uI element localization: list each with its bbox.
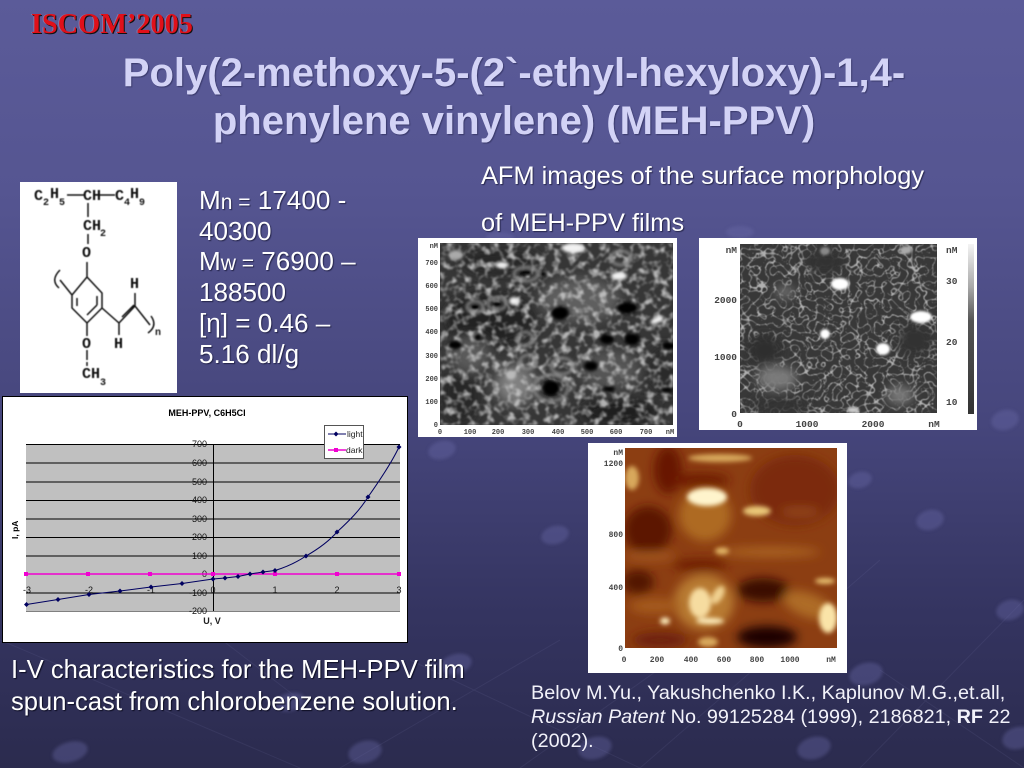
plot area: -1 <box>147 585 155 595</box>
panel: molecular structure: 2 <box>43 198 49 209</box>
panel: molecular structure: H <box>114 336 123 353</box>
AFM image: greyscale pitted film: 600 <box>610 429 622 437</box>
text block: I-V caption <box>11 656 465 717</box>
panel: molecular structure: 9 <box>139 198 145 209</box>
text block: polymer parameters: Mw = 76900 – <box>199 246 356 276</box>
AFM image: colour height map: 0 <box>622 656 627 665</box>
AFM image: greyscale pitted film: 200 <box>425 376 438 384</box>
AFM image: greyscale pitted film: 200 <box>492 429 504 437</box>
AFM image: greyscale pitted film: 300 <box>425 353 438 361</box>
AFM image: colour height map: 800 <box>609 531 623 540</box>
AFM image: greyscale network film: 0 <box>731 409 737 420</box>
AFM image: greyscale network film <box>699 238 977 430</box>
AFM image: greyscale network film: nM <box>726 245 737 256</box>
panel: molecular structure: 5 <box>59 198 65 209</box>
AFM image: greyscale pitted film: nM <box>430 243 438 251</box>
panel: molecular structure: H <box>130 186 139 203</box>
text block: polymer parameters <box>199 185 357 370</box>
AFM image: greyscale network film: 10 <box>946 397 958 408</box>
panel: molecular structure: H <box>130 276 139 293</box>
text block: polymer parameters: 188500 <box>199 277 286 307</box>
chart title: MEH-PPV, C6H5Cl <box>168 408 246 418</box>
heading: AFM caption <box>481 162 926 236</box>
text block: reference <box>531 682 1010 752</box>
AFM image: greyscale pitted film: 700 <box>640 429 652 437</box>
panel: molecular structure: CH <box>82 366 100 383</box>
AFM image: greyscale pitted film <box>418 238 677 437</box>
AFM image: greyscale network film: 2000 <box>862 419 885 430</box>
panel: molecular structure: 2 <box>100 229 106 240</box>
AFM image: greyscale pitted film: 500 <box>425 306 438 314</box>
AFM image: greyscale pitted film: 100 <box>425 399 438 407</box>
AFM image: greyscale network film: 2000 <box>714 295 737 306</box>
light series <box>24 444 402 607</box>
plot area: -3 <box>23 585 31 595</box>
AFM image: greyscale pitted film: nM <box>666 429 674 437</box>
plot area: 200 <box>192 532 207 542</box>
legend: dark <box>346 445 363 455</box>
panel: molecular structure: 3 <box>100 378 106 389</box>
legend <box>324 426 364 458</box>
panel: molecular structure: n <box>155 328 161 339</box>
plot area: 3 <box>396 585 402 595</box>
plot area: -200 <box>189 606 207 616</box>
AFM image: greyscale pitted film: 400 <box>552 429 564 437</box>
text block: polymer parameters: Mn = 17400 - <box>199 185 346 215</box>
AFM image: greyscale pitted film: 700 <box>425 260 438 268</box>
text block: reference: Russian Patent No. 99125284 (1999), 2186821, RF 22 <box>531 706 1010 728</box>
panel: I-V chart <box>2 396 408 643</box>
AFM image: colour height map: 1200 <box>604 460 623 469</box>
legend: light <box>347 429 363 439</box>
title: Poly(2-methoxy-5-(2`-ethyl-hexyloxy)-1,4- <box>123 51 905 95</box>
AFM image: colour height map: nM <box>826 656 836 665</box>
axis label: current: I, pA <box>10 521 20 539</box>
title <box>123 51 905 144</box>
panel: molecular structure: CH <box>83 188 101 205</box>
AFM image: colour height map: 800 <box>750 656 764 665</box>
AFM image: greyscale pitted film: 0 <box>434 422 438 430</box>
heading: AFM caption: AFM images of the surface morphology <box>481 162 924 190</box>
axis label: voltage: U, V <box>203 616 221 626</box>
AFM image: colour height map: 1000 <box>780 656 800 665</box>
AFM image: colour height map: 0 <box>618 645 623 654</box>
panel: molecular structure: C <box>115 188 124 205</box>
AFM image: colour height map <box>588 443 847 673</box>
AFM image: colour height map: 400 <box>609 584 623 593</box>
panel: molecular structure <box>20 182 177 393</box>
dark series <box>24 572 401 576</box>
AFM image: greyscale pitted film: 100 <box>464 429 476 437</box>
AFM image: greyscale pitted film: 300 <box>522 429 534 437</box>
AFM image: greyscale pitted film: 500 <box>581 429 593 437</box>
AFM image: greyscale network film: nM <box>946 245 958 256</box>
AFM image: colour height map: 600 <box>717 656 731 665</box>
panel: molecular structure: O <box>82 245 91 262</box>
text block: polymer parameters: 40300 <box>199 216 272 246</box>
plot area: 0 <box>202 569 207 579</box>
AFM image: greyscale network film: 1000 <box>796 419 819 430</box>
AFM image: greyscale pitted film: 400 <box>425 329 438 337</box>
title: phenylene vinylene) (MEH-PPV) <box>213 99 815 143</box>
plot area: 600 <box>192 458 207 468</box>
plot area: 500 <box>192 477 207 487</box>
text block: I-V caption: I-V characteristics for the MEH-PPV film <box>11 656 465 684</box>
panel: molecular structure: CH <box>83 218 101 235</box>
plot area: 300 <box>192 514 207 524</box>
panel: molecular structure: O <box>82 336 91 353</box>
AFM image: greyscale network film: nM <box>928 419 940 430</box>
panel: molecular structure: H <box>50 186 59 203</box>
AFM image: greyscale pitted film: 0 <box>438 429 442 437</box>
text block: polymer parameters: 5.16 dl/g <box>199 339 299 369</box>
AFM image: colour height map: nM <box>613 449 623 458</box>
plot area: 700 <box>192 439 207 449</box>
plot area: 100 <box>192 551 207 561</box>
AFM image: greyscale network film: 30 <box>946 276 958 287</box>
plot area: -2 <box>85 585 93 595</box>
plot area: 2 <box>334 585 340 595</box>
plot area: 1 <box>272 585 278 595</box>
AFM image: greyscale pitted film: 600 <box>425 283 438 291</box>
plot area: -100 <box>189 588 207 598</box>
AFM image: greyscale network film: 0 <box>737 419 743 430</box>
heading: conference label: ISCOM’2005 <box>31 9 193 40</box>
heading: AFM caption: of MEH-PPV films <box>481 208 684 236</box>
AFM image: greyscale network film: 1000 <box>714 352 737 363</box>
panel: molecular structure: C <box>34 188 43 205</box>
text block: reference: (2002). <box>531 730 594 752</box>
plot area: 400 <box>192 495 207 505</box>
text block: polymer parameters: [η] = 0.46 – <box>199 308 330 338</box>
text block: I-V caption: spun-cast from chlorobenzene solution. <box>11 688 458 716</box>
text block: reference: Belov M.Yu., Yakushchenko I.K., Kaplunov M.G.,et.all, <box>531 682 1005 704</box>
panel: molecular structure: 4 <box>124 198 130 209</box>
plot area <box>23 439 402 616</box>
AFM image: greyscale network film: 20 <box>946 337 958 348</box>
AFM image: colour height map: 400 <box>684 656 698 665</box>
AFM image: colour height map: 200 <box>650 656 664 665</box>
plot area: 0 <box>210 585 216 595</box>
